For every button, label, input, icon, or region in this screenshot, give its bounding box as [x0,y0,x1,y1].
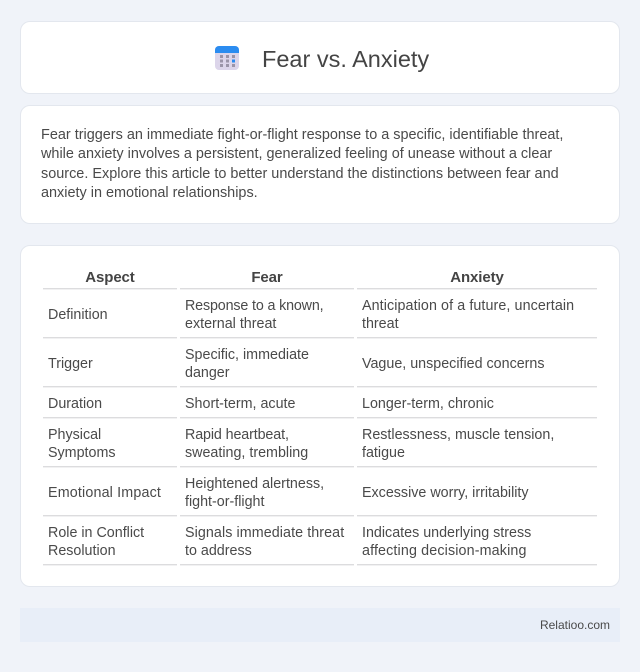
physical symptoms: fear [185,427,308,461]
icon: calendar [215,46,239,70]
row: role in conflict resolution [48,525,144,559]
footer bar [20,608,620,642]
emotional impact: fear [185,476,324,510]
definition: anxiety: threat [362,316,399,332]
row: physical symptoms [48,427,116,461]
definition: anxiety [362,298,574,332]
duration: anxiety: Longer-term, chronic [362,396,494,412]
emotional impact: anxiety: Excessive worry, irritability [362,485,529,501]
intro text: Fear triggers an immediate fight-or-flight response to a specific, identifiable threat, [41,127,563,143]
role in conflict resolution: anxiety: affecting decision-making [362,543,527,559]
title: Fear vs. Anxiety [262,46,429,72]
row: definition: Definition [48,307,108,323]
intro text [41,127,563,201]
emotional impact: fear: fight-or-flight [185,494,264,510]
trigger: fear [185,347,309,381]
trigger: fear: Specific, immediate [185,347,309,363]
table panel [20,245,620,587]
physical symptoms: anxiety: fatigue [362,445,405,461]
row: emotional impact: Emotional Impact [48,485,161,501]
role in conflict resolution: anxiety [362,525,531,559]
row: trigger: Trigger [48,356,93,372]
intro text: source. Explore this article to better understand the distinctions between fear and [41,166,559,182]
definition: fear: Response to a known, [185,298,323,314]
duration: fear: Short-term, acute [185,396,295,412]
physical symptoms: anxiety [362,427,554,461]
physical symptoms: anxiety: Restlessness, muscle tension, [362,427,554,443]
intro text: while anxiety involves a persistent, generalized feeling of unease without a clear [41,146,552,162]
row: physical symptoms: Physical [48,427,101,443]
header panel [20,21,620,94]
intro panel [20,105,620,224]
table [43,269,597,566]
role in conflict resolution: fear: Signals immediate threat [185,525,344,541]
table header: anxiety: Anxiety [450,269,504,286]
role in conflict resolution: fear: to address [185,543,252,559]
trigger: fear: danger [185,365,230,381]
physical symptoms: fear: sweating, trembling [185,445,308,461]
row: physical symptoms: Symptoms [48,445,116,461]
row: duration: Duration [48,396,102,412]
definition: fear [185,298,323,332]
role in conflict resolution: fear [185,525,344,559]
role in conflict resolution: anxiety: Indicates underlying stress [362,525,531,541]
row: role in conflict resolution: Resolution [48,543,116,559]
row: role in conflict resolution: Role in Conflict [48,525,144,541]
table header: fear: Fear [251,269,283,286]
definition: fear: external threat [185,316,276,332]
emotional impact: fear: Heightened alertness, [185,476,324,492]
physical symptoms: fear: Rapid heartbeat, [185,427,289,443]
definition: anxiety: Anticipation of a future, uncertain [362,298,574,314]
table header: aspect: Aspect [85,269,135,286]
intro text: anxiety in emotional relationships. [41,185,258,201]
trigger: anxiety: Vague, unspecified concerns [362,356,545,372]
footer credit: Relatioo.com [540,618,610,632]
